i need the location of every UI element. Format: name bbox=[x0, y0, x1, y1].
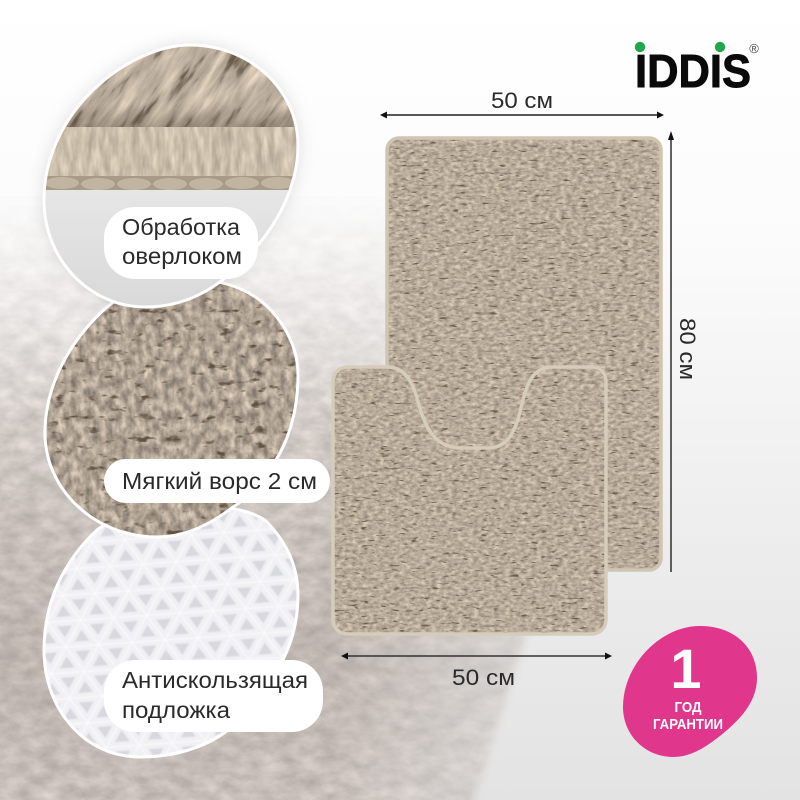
dimension: height 80 cm bbox=[668, 131, 700, 572]
contour toilet mat bbox=[333, 367, 606, 634]
dimension: height 80 cm: 80 см bbox=[675, 318, 700, 380]
callout: anti-slip backing bbox=[104, 660, 323, 732]
panel: soft pile photo bbox=[44, 282, 300, 538]
logo: IDDIS: ® bbox=[749, 41, 759, 56]
badge: 1 year warranty bbox=[623, 626, 757, 757]
logo: IDDIS: IDDIS bbox=[635, 45, 751, 97]
callout: soft pile bbox=[104, 459, 330, 503]
badge: 1 year warranty: ГОД bbox=[674, 699, 702, 716]
callout: soft pile: Мягкий ворс 2 см bbox=[122, 468, 317, 494]
dimension: top width 50 cm bbox=[380, 88, 664, 118]
dimension: bottom width 50 cm bbox=[341, 652, 612, 690]
callout: overlock bbox=[104, 207, 258, 279]
large rectangular mat bbox=[387, 138, 661, 570]
callout: anti-slip backing: подложка bbox=[122, 697, 230, 723]
panel: anti-slip backing photo bbox=[42, 508, 300, 758]
dimension: bottom width 50 cm: 50 см bbox=[452, 665, 515, 690]
panel: overlock edge photo bbox=[38, 40, 304, 310]
callout: overlock: оверлоком bbox=[122, 243, 242, 269]
badge: 1 year warranty: 1 bbox=[670, 637, 702, 700]
badge: 1 year warranty: ГАРАНТИИ bbox=[653, 716, 723, 733]
callout: anti-slip backing: Антискользящая bbox=[122, 667, 308, 693]
callout: overlock: Обработка bbox=[122, 214, 240, 240]
dimension: top width 50 cm: 50 см bbox=[491, 88, 553, 113]
background fur rug photo bbox=[0, 228, 528, 800]
